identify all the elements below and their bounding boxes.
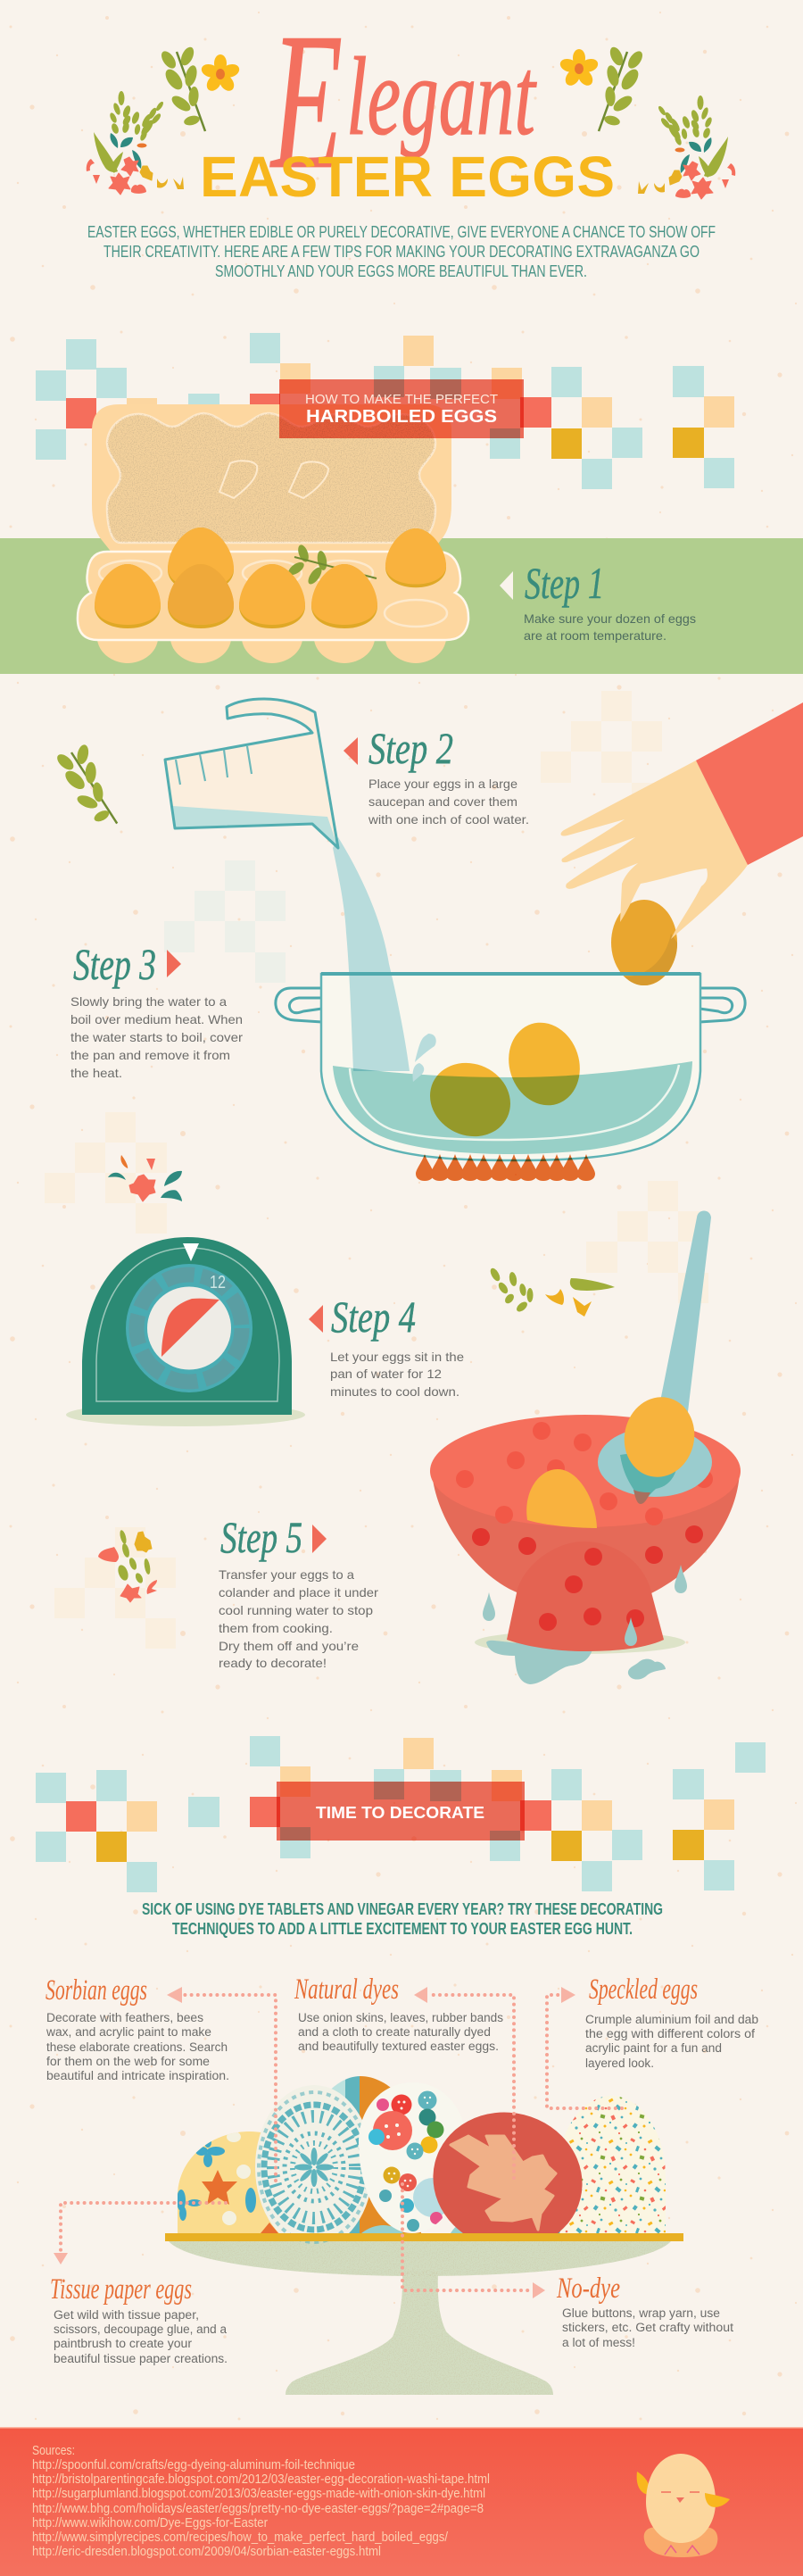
faint squares near spoon <box>586 1181 708 1303</box>
step 1: are at room temperature. <box>524 628 666 643</box>
step 3: boil over medium heat. When <box>70 1012 243 1026</box>
technique: Tissue paper eggs <box>50 2273 228 2365</box>
step 1: Make sure your dozen of eggs <box>524 611 696 626</box>
technique: No-dye: No-dye <box>556 2273 620 2305</box>
step 1 <box>500 558 696 643</box>
pixel squares: decorate section <box>36 1736 766 1892</box>
eggs in pan <box>418 1013 591 1150</box>
step 2 <box>344 723 529 827</box>
step 5: Transfer your eggs to a <box>219 1567 354 1582</box>
title script word: legant <box>346 34 537 159</box>
banner: hardboiled eggs <box>279 379 524 438</box>
sources list: http://eric-dresden.blogspot.com/2009/04/sorbian-easter-eggs.html <box>32 2545 381 2559</box>
egg: tissue paper <box>178 2131 279 2233</box>
technique: Speckled eggs: acrylic paint for a fun and <box>585 2041 722 2055</box>
decorated eggs <box>178 2076 666 2244</box>
saucepan with water, eggs and burner <box>276 837 745 1181</box>
technique: Tissue paper eggs: Get wild with tissue paper, <box>54 2308 199 2322</box>
step 5 <box>219 1512 378 1670</box>
eggs in carton <box>95 528 446 628</box>
step 5: colander and place it under <box>219 1585 378 1600</box>
intro text <box>87 223 716 280</box>
step 3: the heat. <box>70 1066 122 1080</box>
teal base behind eggs <box>361 2223 477 2233</box>
technique: Speckled eggs: Speckled eggs <box>589 1974 698 2006</box>
technique: Sorbian eggs: Decorate with feathers, bees <box>46 2011 203 2024</box>
technique: No-dye <box>556 2273 733 2349</box>
pan water <box>333 1061 692 1154</box>
title block word: EASTER EGGS <box>200 145 615 209</box>
footer band <box>0 2427 803 2576</box>
step 2: with one inch of cool water. <box>368 812 529 827</box>
technique: No-dye: Glue buttons, wrap yarn, use <box>562 2306 720 2320</box>
faint squares near step 2 <box>541 691 662 813</box>
egg: striped <box>332 2076 421 2233</box>
banner: hardboiled eggs: HOW TO MAKE THE PERFECT <box>305 392 498 407</box>
step 3: the water starts to boil, cover <box>70 1030 243 1044</box>
sources list: Sources: <box>32 2444 75 2458</box>
step 5: Dry them off and you’re <box>219 1639 359 1653</box>
technique: Tissue paper eggs: Tissue paper eggs <box>50 2273 192 2306</box>
carton lid <box>92 404 451 558</box>
bowl rim <box>430 1415 741 1527</box>
flower decoration above timer <box>108 1155 182 1201</box>
step 2: Place your eggs in a large <box>368 777 517 791</box>
step 3: Step 3 <box>73 939 156 989</box>
plate <box>475 1631 685 1654</box>
technique: Speckled eggs <box>585 1974 758 2070</box>
spoon <box>598 1210 712 1504</box>
technique: Sorbian eggs: wax, and acrylic paint to make <box>46 2025 211 2039</box>
technique: No-dye: stickers, etc. Get crafty without <box>562 2321 733 2334</box>
intro text: SMOOTHLY AND YOUR EGGS MORE BEAUTIFUL THAN EVER. <box>215 262 587 280</box>
technique: Speckled eggs: the egg with different colors of <box>585 2027 755 2040</box>
technique: Tissue paper eggs: scissors, decoupage glue, and a <box>54 2323 227 2336</box>
sources list: http://www.bhg.com/holidays/easter/eggs/pretty-no-dye-easter-eggs/?page=2#page=8 <box>32 2502 484 2516</box>
egg: speckled <box>558 2096 666 2233</box>
sources list: http://spoonful.com/crafts/egg-dyeing-aluminum-foil-technique <box>32 2458 355 2472</box>
rim dots <box>456 1422 713 1525</box>
technique: Natural dyes <box>294 1974 503 2053</box>
dotted connector lines <box>54 1987 622 2298</box>
kitchen timer: 12 <box>210 1273 226 1292</box>
pixel squares: hardboiled section <box>36 333 734 489</box>
step 4: minutes to cool down. <box>330 1384 459 1399</box>
measuring jug pouring water <box>165 699 338 848</box>
step 5: Step 5 <box>220 1512 302 1562</box>
egg: lace pattern <box>255 2089 369 2244</box>
decoration near step 5 <box>98 1529 157 1602</box>
cake stand <box>169 2241 671 2395</box>
kitchen timer <box>66 1237 305 1426</box>
body dots <box>472 1525 703 1631</box>
sources list: http://www.simplyrecipes.com/recipes/how_to_make_perfect_hard_boiled_eggs/ <box>32 2530 449 2545</box>
gold plate top <box>165 2233 683 2241</box>
faint squares near step 5 <box>54 1527 176 1649</box>
sources list: http://sugarplumland.blogspot.com/2013/03/easter-eggs-made-with-onion-skin-dye.html <box>32 2487 485 2501</box>
leaves decoration <box>489 1267 615 1317</box>
step 2: saucepan and cover them <box>368 794 517 809</box>
technique: No-dye: a lot of mess! <box>562 2336 635 2349</box>
step 4 <box>309 1292 464 1399</box>
technique: Sorbian eggs <box>46 1974 229 2082</box>
technique: Tissue paper eggs: paintbrush to create your <box>54 2337 193 2350</box>
step 5: cool running water to stop <box>219 1603 373 1617</box>
sources list: http://www.wikihow.com/Dye-Eggs-for-Easter <box>32 2516 268 2530</box>
technique: Sorbian eggs: these elaborate creations. Search <box>46 2040 228 2054</box>
technique: Speckled eggs: layered look. <box>585 2057 654 2070</box>
bowl body <box>432 1473 740 1593</box>
banner: time to decorate: TIME TO DECORATE <box>316 1804 484 1822</box>
title: Elegant Easter Eggs <box>200 0 615 210</box>
splash drops <box>413 1034 436 1082</box>
carton herb sprig <box>286 544 377 586</box>
branch decoration <box>53 739 117 834</box>
step 3: Slowly bring the water to a <box>70 994 227 1009</box>
floral decoration left <box>87 45 241 195</box>
floral decoration right <box>559 45 735 199</box>
decorate intro text: SICK OF USING DYE TABLETS AND VINEGAR EVERY YEAR? TRY THESE DECORATING <box>142 1900 663 1918</box>
egg in bowl <box>526 1469 597 1528</box>
step 4: Let your eggs sit in the <box>330 1350 464 1364</box>
technique: Sorbian eggs: for them on the web for some <box>46 2055 210 2068</box>
technique: Natural dyes: and beautifully textured easter eggs. <box>298 2040 499 2053</box>
hand holding egg <box>561 702 803 939</box>
step 1: Step 1 <box>525 558 604 608</box>
technique: Natural dyes: and a cloth to create naturally dyed <box>298 2025 491 2039</box>
pan handles <box>276 988 745 1022</box>
decorate intro text: TECHNIQUES TO ADD A LITTLE EXCITEMENT TO YOUR EASTER EGG HUNT. <box>172 1920 633 1938</box>
sources list: http://bristolparentingcafe.blogspot.com/2012/03/easter-egg-decoration-washi-tape.html <box>32 2472 490 2487</box>
technique: Tissue paper eggs: beautiful tissue paper creations. <box>54 2352 228 2365</box>
egg carton <box>78 404 468 663</box>
banner: time to decorate <box>277 1782 525 1841</box>
red sleeve <box>696 702 803 865</box>
held egg <box>611 900 677 985</box>
technique: Natural dyes: Use onion skins, leaves, rubber bands <box>298 2011 503 2024</box>
technique: Speckled eggs: Crumple aluminium foil and dab <box>585 2013 758 2026</box>
faint squares near step 4 left <box>45 1112 167 1234</box>
colander with egg and spoon <box>430 1210 741 1684</box>
pan body <box>321 974 700 1160</box>
step 3 <box>70 939 243 1080</box>
technique: Sorbian eggs: Sorbian eggs <box>46 1974 147 2007</box>
egg: buttons <box>359 2087 444 2233</box>
step 5: them from cooking. <box>219 1621 333 1635</box>
sources list <box>32 2444 490 2559</box>
water drops <box>483 1565 687 1646</box>
carton base <box>78 552 468 663</box>
water stream <box>333 837 410 1071</box>
step 2: Step 2 <box>368 723 453 773</box>
step 5: ready to decorate! <box>219 1656 327 1670</box>
faint squares near step 3 <box>164 860 286 983</box>
egg: red leaf print <box>433 2112 583 2233</box>
green grass band <box>0 538 803 674</box>
puddle <box>486 1641 666 1684</box>
technique: Sorbian eggs: beautiful and intricate inspiration. <box>46 2069 229 2082</box>
step 4: Step 4 <box>331 1292 416 1342</box>
decorate intro text <box>142 1900 663 1938</box>
technique: Natural dyes: Natural dyes <box>294 1974 399 2006</box>
bowl stem <box>507 1541 664 1651</box>
banner: hardboiled eggs: HARDBOILED EGGS <box>306 407 497 427</box>
burner flames <box>416 1154 595 1181</box>
step 4: pan of water for 12 <box>330 1367 442 1381</box>
chick egg mascot <box>637 2454 730 2557</box>
step 3: the pan and remove it from <box>70 1048 230 1062</box>
